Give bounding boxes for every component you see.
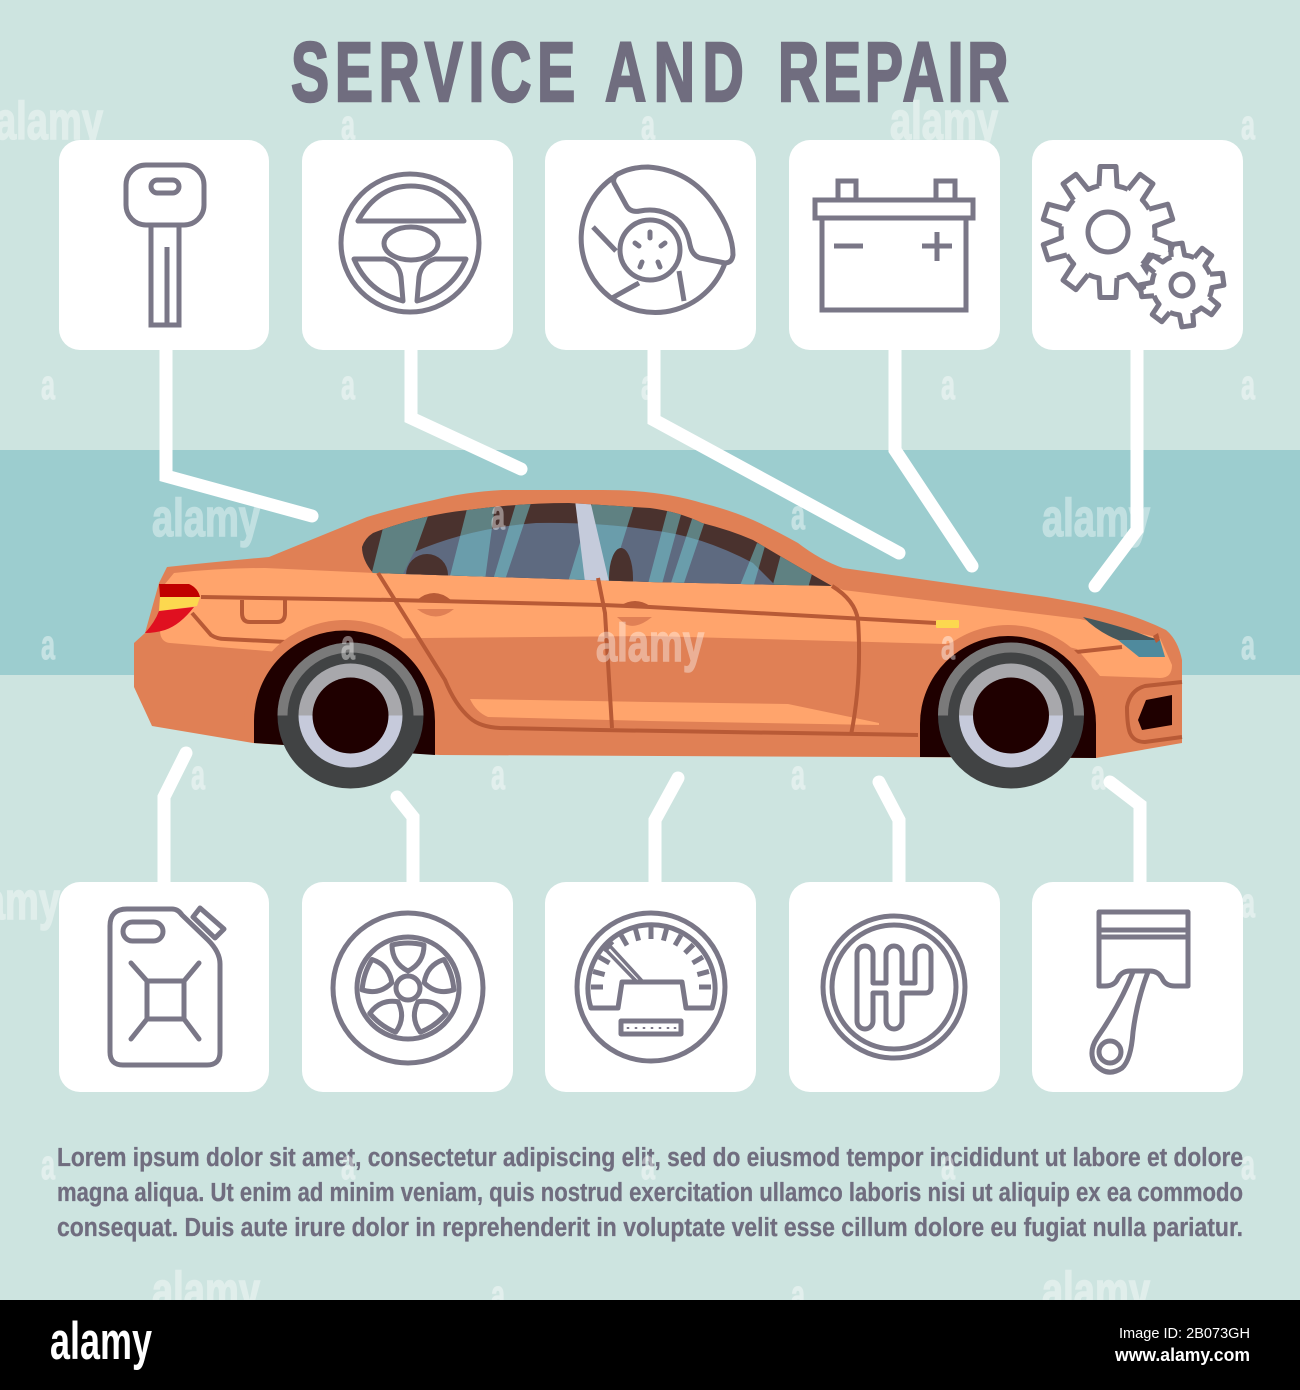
watermarks: a bbox=[491, 1271, 505, 1318]
car sill highlight bbox=[470, 699, 879, 725]
watermarks: a bbox=[41, 621, 55, 668]
front wheel bbox=[938, 642, 1084, 788]
watermarks: alamy bbox=[152, 1262, 260, 1321]
watermarks: a bbox=[1241, 1141, 1255, 1188]
icon: car key bbox=[126, 165, 204, 325]
car body lines bbox=[192, 573, 1122, 735]
watermarks: a bbox=[491, 751, 505, 798]
icon: car battery bbox=[815, 181, 973, 310]
watermarks: a bbox=[641, 1141, 655, 1188]
watermarks: a bbox=[1241, 621, 1255, 668]
icon: piston bbox=[1092, 912, 1188, 1072]
watermarks: alamy bbox=[1042, 1262, 1150, 1321]
panel: speedometer bbox=[545, 882, 756, 1092]
watermarks: a bbox=[491, 491, 505, 538]
footer bar bbox=[0, 1300, 1300, 1390]
tail light bbox=[145, 584, 200, 633]
watermarks: a bbox=[1241, 879, 1255, 926]
indicator bbox=[936, 620, 959, 628]
footer logo: alamy bbox=[50, 1312, 152, 1371]
watermarks: a bbox=[941, 621, 955, 668]
panel: key bbox=[59, 140, 269, 350]
title: REPAIR bbox=[778, 26, 1009, 120]
background band bbox=[0, 450, 1300, 675]
panel: gear shift bbox=[789, 882, 1000, 1092]
watermarks: alamy bbox=[152, 489, 260, 548]
panel: piston bbox=[1032, 882, 1243, 1092]
watermarks: a bbox=[1241, 361, 1255, 408]
watermarks: a bbox=[791, 1271, 805, 1318]
watermarks: a bbox=[341, 101, 355, 148]
title bbox=[291, 26, 1009, 120]
icon: wheel rim bbox=[333, 913, 483, 1063]
icon: jerry can bbox=[110, 908, 224, 1065]
watermarks: a bbox=[41, 361, 55, 408]
rear wheel arch bbox=[244, 620, 446, 755]
footer image id: Image ID: 2B073GH bbox=[1119, 1325, 1250, 1342]
watermarks: a bbox=[341, 361, 355, 408]
bumper vent bbox=[1127, 682, 1182, 742]
watermarks: alamy bbox=[1042, 489, 1150, 548]
body text bbox=[57, 1144, 1243, 1242]
title: AND bbox=[605, 26, 744, 120]
icon: speedometer bbox=[577, 913, 725, 1061]
watermarks: a bbox=[1091, 751, 1105, 798]
car body bbox=[134, 490, 1182, 758]
panel: fuel canister bbox=[59, 882, 269, 1092]
icon: gear shift pattern bbox=[823, 916, 965, 1058]
watermarks: alamy bbox=[890, 92, 998, 151]
watermarks: a bbox=[941, 361, 955, 408]
watermarks: a bbox=[791, 491, 805, 538]
car upper light panel bbox=[160, 568, 1172, 678]
watermarks: a bbox=[641, 361, 655, 408]
connector lines bbox=[164, 345, 1140, 887]
watermarks: a bbox=[41, 1141, 55, 1188]
footer url: www.alamy.com bbox=[1114, 1345, 1250, 1365]
icon: brake disc and caliper bbox=[581, 167, 733, 312]
panel: wheel bbox=[302, 882, 513, 1092]
car door handles bbox=[417, 593, 652, 626]
watermarks: a bbox=[941, 1141, 955, 1188]
watermarks: a bbox=[341, 621, 355, 668]
watermarks: a bbox=[341, 1141, 355, 1188]
car bbox=[134, 490, 1182, 788]
panel: steering wheel bbox=[302, 140, 513, 350]
front wheel arch bbox=[909, 625, 1107, 758]
panel: brake disc bbox=[545, 140, 756, 350]
car window bbox=[362, 503, 832, 586]
panel: gears bbox=[1032, 140, 1243, 350]
title: SERVICE bbox=[291, 26, 575, 120]
watermarks: alamy bbox=[596, 614, 704, 673]
icon: steering wheel bbox=[341, 174, 479, 312]
watermarks: a bbox=[191, 751, 205, 798]
watermarks: a bbox=[641, 101, 655, 148]
watermarks: a bbox=[791, 751, 805, 798]
rear wheel bbox=[278, 642, 424, 788]
watermarks: a bbox=[1241, 101, 1255, 148]
icon: gears bbox=[1040, 166, 1229, 332]
panel: battery bbox=[789, 140, 1000, 350]
headlight bbox=[1083, 617, 1165, 657]
